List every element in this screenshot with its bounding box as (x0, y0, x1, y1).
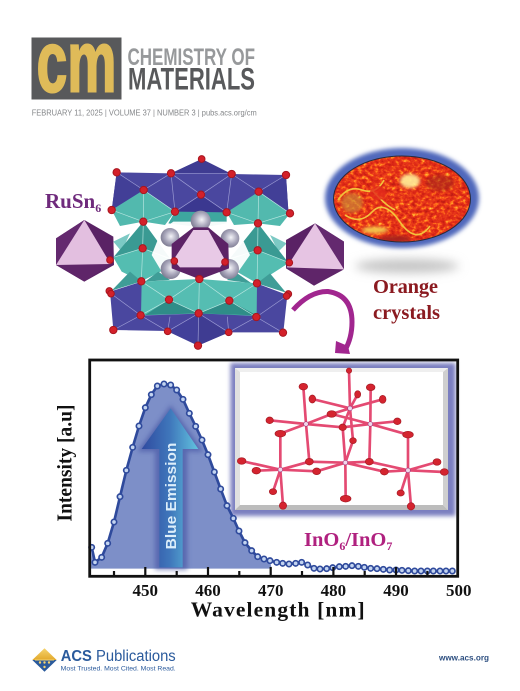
x axis numbers: 490 (383, 581, 409, 600)
ACS tagline: Most Trusted. Most Cited. Most Read. (61, 665, 176, 672)
InO6/InO7 label: InO (304, 529, 339, 551)
Orange crystals label: Orange (373, 276, 438, 298)
inset: InO6/InO7 network (230, 363, 456, 516)
curved arrow (293, 291, 352, 354)
journal title (128, 44, 255, 96)
logo box: cm: cm (36, 14, 116, 110)
right RuSn6 octahedron (286, 223, 344, 286)
y axis title: Intensity [a.u] (52, 404, 76, 522)
website: www.acs.org (438, 653, 489, 663)
blue polyhedra top (112, 159, 288, 214)
photo glow (325, 148, 479, 248)
photo shadow (355, 259, 459, 273)
data points (89, 381, 455, 574)
central gap (152, 222, 250, 277)
InO6/InO7 label: 6 (339, 539, 345, 553)
grey spheres (161, 211, 239, 279)
blue emission arrow (137, 405, 203, 570)
logo box: cm (32, 14, 122, 110)
blue polyhedra bottom (110, 282, 287, 346)
blue emission arrow: Blue Emission (164, 443, 180, 549)
orange crystals photo (325, 148, 479, 273)
issue line: FEBRUARY 11, 2025 | VOLUME 37 | NUMBER 3 | pubs.acs.org/cm (32, 108, 257, 118)
chart frame (90, 360, 458, 576)
In-O network (237, 368, 448, 510)
InO6/InO7 label: /InO (344, 529, 386, 551)
spectrum chart (52, 360, 471, 622)
journal logo (32, 14, 255, 110)
x axis numbers (133, 581, 471, 600)
axis ticks (114, 567, 427, 576)
photo outline (334, 156, 470, 242)
ACS Publications logo (32, 648, 176, 672)
crystal texture (334, 156, 470, 242)
ACS Publications wordmark: ACS Publications (61, 648, 176, 665)
RuSn6 label: 6 (95, 201, 101, 215)
central RuSn6 octahedron (172, 227, 229, 279)
x axis numbers: 460 (195, 581, 221, 600)
left RuSn6 octahedron (56, 220, 114, 282)
InO6/InO7 label: 7 (386, 539, 392, 553)
journal title: CHEMISTRY OF (128, 44, 255, 71)
emission curve (89, 381, 455, 574)
Orange crystals label (373, 276, 440, 324)
x axis numbers: 470 (258, 581, 283, 600)
crystal structure (56, 156, 344, 349)
teal polyhedra (112, 190, 290, 317)
oxygen atoms (106, 156, 294, 349)
x axis numbers: 480 (321, 581, 346, 600)
Orange crystals label: crystals (373, 302, 440, 324)
x axis numbers: 500 (446, 581, 471, 600)
RuSn6 label: RuSn (45, 189, 95, 213)
x axis numbers: 450 (133, 581, 158, 600)
ACS diamond icon (32, 648, 57, 672)
x axis title: Wavelength [nm] (191, 598, 365, 622)
journal title: MATERIALS (128, 60, 255, 96)
